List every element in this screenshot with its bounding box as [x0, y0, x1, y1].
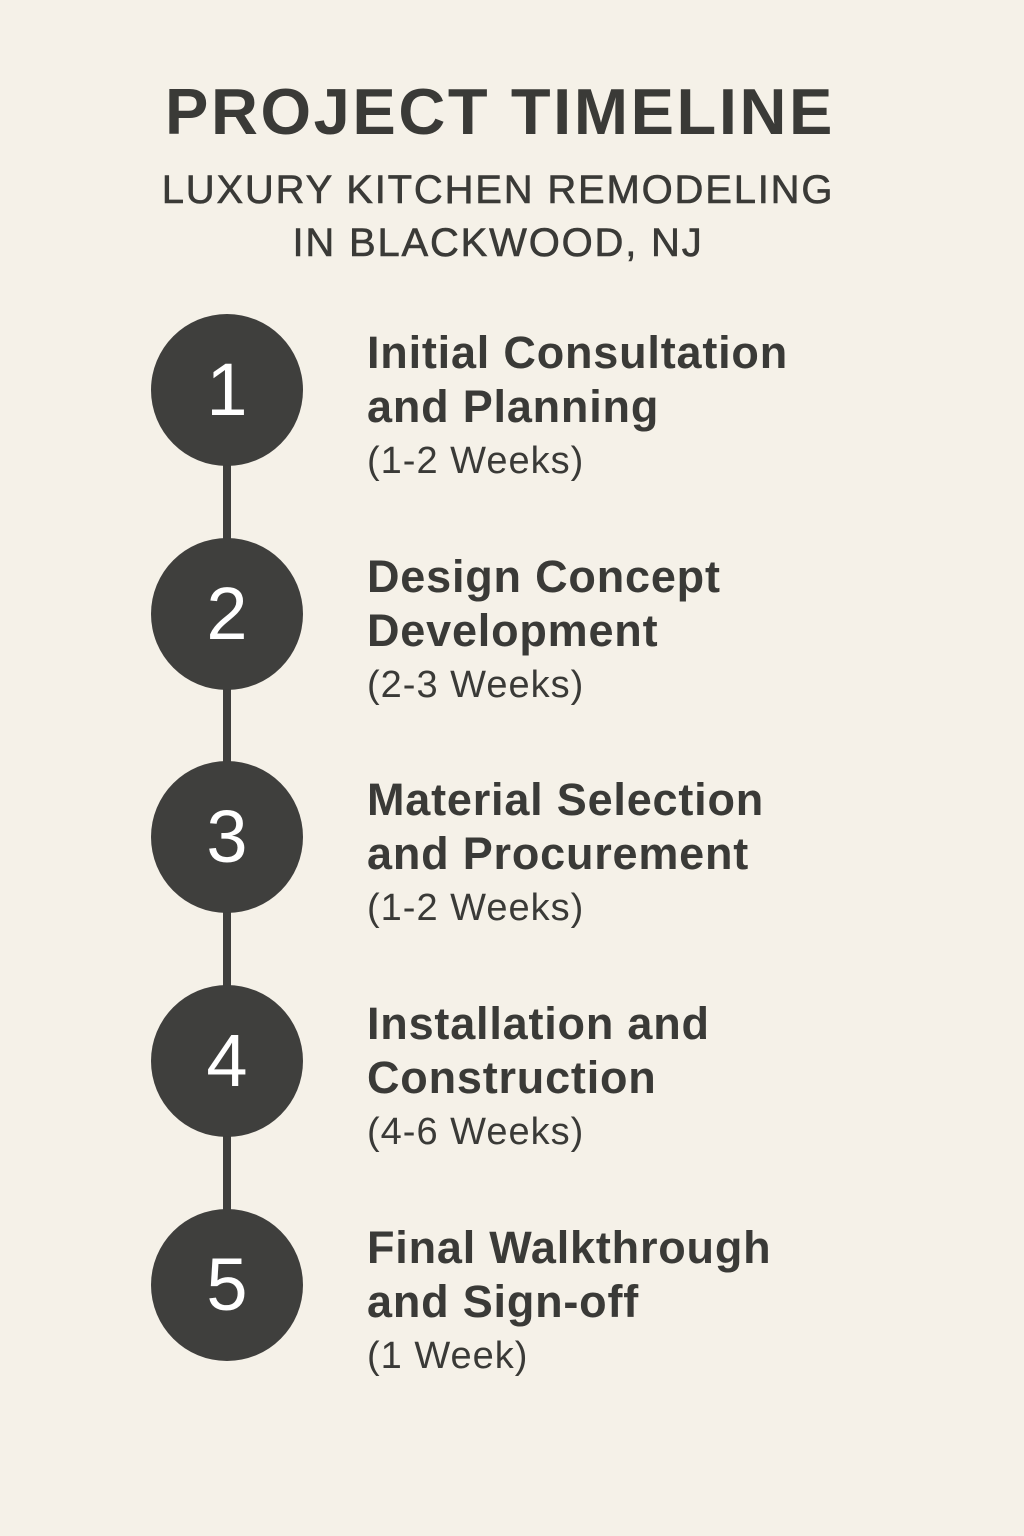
circle 5: 5 — [206, 1243, 248, 1326]
circle 5 — [151, 1209, 303, 1361]
circle 1 — [151, 314, 303, 466]
subtitle: IN BLACKWOOD, NJ — [292, 221, 704, 265]
circle 4 — [151, 985, 303, 1137]
circle 2: 2 — [206, 572, 248, 655]
step 3 text: Material Selection — [367, 774, 764, 825]
step 5 text: Final Walkthrough — [367, 1222, 771, 1273]
step 4 text: (4-6 Weeks) — [367, 1111, 584, 1153]
circle 4: 4 — [206, 1019, 248, 1102]
step 1 text: (1-2 Weeks) — [367, 440, 584, 482]
step 2 text: Development — [367, 605, 658, 656]
subtitle: LUXURY KITCHEN REMODELING — [162, 168, 834, 212]
step 3 text: and Procurement — [367, 828, 749, 879]
step 3 text — [367, 774, 764, 929]
step 1 text — [367, 327, 788, 482]
step 2 text: Design Concept — [367, 551, 721, 602]
step 4 text: Construction — [367, 1052, 657, 1103]
step 2 text: (2-3 Weeks) — [367, 664, 584, 706]
circle 3 — [151, 761, 303, 913]
circle 3: 3 — [206, 795, 248, 878]
subtitle — [162, 168, 834, 265]
circle 1: 1 — [206, 348, 248, 431]
title: PROJECT TIMELINE — [165, 75, 835, 148]
timeline connector line — [223, 390, 231, 1285]
step 4 text — [367, 998, 710, 1153]
step 2 text — [367, 551, 721, 706]
step 5 text: (1 Week) — [367, 1335, 528, 1377]
step 1 text: Initial Consultation — [367, 327, 788, 378]
step 5 text: and Sign-off — [367, 1276, 639, 1327]
step 4 text: Installation and — [367, 998, 710, 1049]
step 5 text — [367, 1222, 771, 1377]
step 1 text: and Planning — [367, 381, 659, 432]
circle 2 — [151, 538, 303, 690]
step 3 text: (1-2 Weeks) — [367, 887, 584, 929]
